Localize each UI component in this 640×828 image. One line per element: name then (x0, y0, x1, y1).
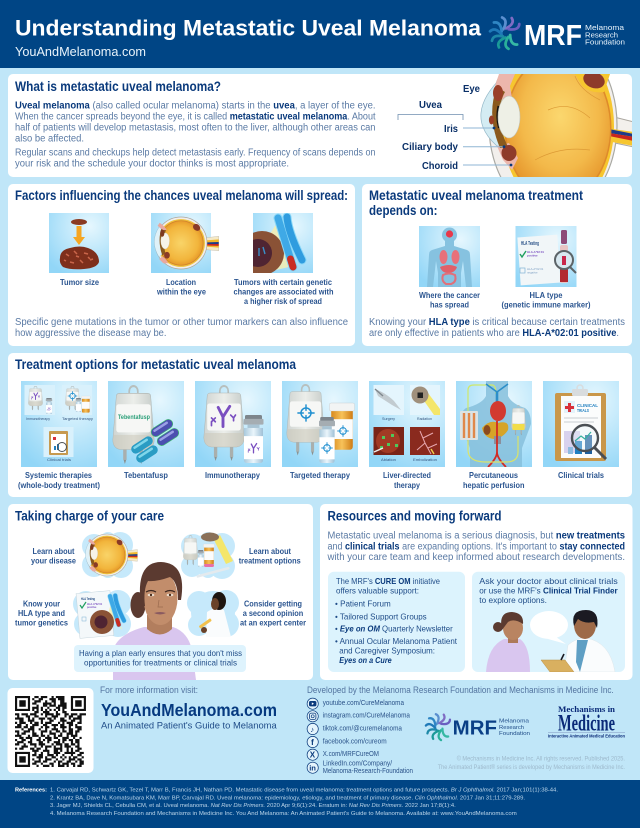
box: CURE OM initiative: • Annual Ocular Melanoma Patient (335, 637, 458, 646)
box: CURE OM initiative: and Caregiver Symposium: (339, 647, 435, 656)
body text: Specific gene mutations in the tumor or other tumor markers can also influence (15, 317, 348, 328)
icon: genetic changes (253, 213, 313, 273)
label: location: within the eye (156, 288, 206, 296)
label: tumor size: Tumor size (60, 278, 99, 287)
box: clinical trial finder (472, 572, 625, 672)
definition paragraph: Uveal melanoma (also called ocular melanoma) starts in the uvea, a layer of the eye. (15, 101, 376, 112)
label: learn about treatment options (239, 547, 301, 565)
illustration: woman patient (113, 562, 196, 680)
card: clinical trials: TRIALS (577, 408, 589, 413)
icon: HLA test card: negative (527, 270, 538, 274)
box: CURE OM initiative: • Tailored Support Groups (335, 612, 427, 621)
callout: plan early: Having a plan early ensures that you don't miss (79, 649, 242, 658)
social media links: tiktok.com/@curemelanoma (323, 723, 403, 732)
callout: plan early (74, 645, 246, 672)
label: systemic therapies: (whole-body treatment) (18, 481, 100, 490)
label: know your HLA type (15, 600, 68, 627)
cloud icon: HLA and genetics (73, 590, 131, 638)
developed by line: Developed by the Melanoma Research Foundation and Mechanisms in Medicine Inc. (307, 685, 614, 695)
icon: HLA test card: HLA-A*02:01 (527, 267, 544, 271)
body text: Knowing your HLA type is critical because certain treatments (369, 317, 625, 328)
MRF logo footer: MRF (453, 718, 497, 740)
label: liver-directed therapy (383, 471, 431, 490)
Mechanisms in Medicine logo: Interactive Animated Medical Education (548, 734, 625, 738)
label: genetic changes: changes are associated with (234, 288, 334, 296)
label: immunotherapy: Immunotherapy (205, 471, 260, 480)
copyright: The Animated Patient® series is developed by Mechanisms in Medicine Inc. (438, 764, 625, 771)
icon: HLA test card: positive (527, 254, 538, 258)
MRF logo footer: Foundation (499, 731, 530, 737)
label: second opinion: Consider getting (244, 600, 302, 609)
label: percutaneous hepatic perfusion (463, 471, 524, 490)
label: know your HLA type: HLA type and (18, 609, 65, 618)
label: percutaneous hepatic perfusion: hepatic perfusion (463, 481, 524, 490)
heading: Taking charge of your care (15, 508, 164, 524)
label: learn about treatment options: treatment options (239, 556, 301, 565)
eye anatomy labels: Ciliary body (402, 141, 458, 153)
references footer: 1. Carvajal RD, Schwartz GK, Tezel T, Marr B, Francis JH, Nathan PD. Metastatic disease from uveal melanoma: treatment options and future prospects. Br J Ophthalmol. 2017 Jan;101(1):38-44. (50, 788, 558, 794)
heading: Metastatic uveal melanoma treatment (369, 188, 583, 203)
title: Understanding Metastatic Uveal Melanoma (15, 16, 482, 40)
website promo block: YouAndMelanoma.com (101, 700, 277, 720)
box: CURE OM initiative: The MRF's CURE OM initiative (336, 577, 440, 586)
callout: plan early: opportunities for treatments or clinical trials (84, 659, 237, 668)
label: liver-directed therapy: Liver-directed (383, 471, 431, 480)
card: clinical trials: CLINICAL (577, 403, 598, 408)
MRF logo footer (426, 714, 530, 740)
MRF logo: MRF (524, 20, 582, 52)
eye anatomy illustration (480, 74, 632, 177)
label: know your HLA type: tumor genetics (15, 618, 68, 627)
body text (369, 317, 625, 339)
card: liver-directed therapy: Radiation (417, 417, 432, 421)
label: genetic changes (234, 278, 334, 306)
eye anatomy labels: Uvea (419, 99, 442, 111)
definition paragraph: also be affected. (15, 133, 84, 144)
Mechanisms in Medicine logo: Mechanisms in (558, 704, 615, 714)
social media links (307, 698, 413, 775)
icon: HLA test card: HLA-A*02:01 (527, 250, 544, 254)
copyright: © Mechanisms in Medicine Inc. All rights reserved. Published 2025. (457, 756, 625, 763)
illustration: patient and doctor (486, 610, 615, 672)
label: HLA type (502, 291, 591, 310)
label: second opinion: at an expert center (240, 618, 307, 627)
cloud icon: HLA and genetics: HLA-A*02:01 (87, 603, 103, 606)
label: location (156, 278, 206, 296)
label: learn about treatment options: Learn about (249, 547, 291, 556)
label: second opinion (240, 600, 307, 627)
label: liver-directed therapy: therapy (394, 481, 420, 490)
card: systemic therapies: Clinical trials (47, 458, 71, 462)
website promo block: For more information visit: (100, 685, 198, 695)
QR code (8, 688, 94, 773)
social media links: X.com/MRFCureOM (323, 749, 379, 758)
label: second opinion: a second opinion (243, 609, 303, 618)
card: liver-directed therapy: Embolization (413, 458, 437, 462)
card: targeted therapy (282, 381, 358, 467)
MRF logo (490, 17, 625, 52)
card: percutaneous hepatic perfusion (456, 381, 532, 467)
MRF logo footer: Melanoma (499, 719, 530, 725)
icon: HLA test card (516, 226, 576, 287)
social media links: youtube.com/CureMelanoma (323, 698, 405, 707)
label: HLA type: HLA type (530, 291, 563, 300)
box: clinical trial finder: Ask your doctor about clinical trials (479, 577, 618, 586)
panel: treatment depends on (362, 184, 632, 346)
social media links: ♪ (310, 725, 314, 734)
card: systemic therapies (21, 381, 97, 467)
cloud icon: treatment options (181, 532, 235, 579)
label: where the cancer has spread: Where the cancer (419, 291, 481, 300)
icon: HLA test card: HLA Testing (521, 241, 539, 247)
icon: eye location (151, 213, 219, 273)
panel: taking charge of your care (8, 504, 313, 680)
box: CURE OM initiative: • Patient Forum (335, 600, 391, 609)
box: CURE OM initiative: Eyes on a Cure (339, 656, 392, 665)
references footer: 2. Krantz BA, Dave N, Komatsubara KM, Marr BP, Carvajal RD. Uveal melanoma: epidemiology, etiology, and treatment of primary disease. Clin Ophthalmol. 2017 Jan 31;11:279-289. (50, 795, 525, 801)
Mechanisms in Medicine logo (548, 704, 625, 738)
definition paragraph: When the cancer spreads beyond the eye, it is called metastatic uveal melanoma. About (15, 112, 376, 123)
card: systemic therapies: Immunotherapy (26, 417, 50, 421)
box: CURE OM initiative (328, 572, 465, 672)
box: clinical trial finder: to explore options. (479, 596, 547, 605)
label: clinical trials: Clinical trials (558, 471, 604, 480)
heading: depends on: (369, 203, 438, 218)
website promo block: An Animated Patient's Guide to Melanoma (101, 720, 277, 731)
social media links: LinkedIn.com/Company/ (323, 758, 393, 767)
panel: resources and moving forward (320, 504, 632, 680)
label: genetic changes: Tumors with certain genetic (234, 278, 332, 287)
screening paragraph: Regular scans and checkups help detect metastasis early. Frequency of scans depends on (15, 148, 376, 159)
card: clinical trials (543, 381, 619, 467)
social media links: in (309, 764, 316, 772)
cloud icon: HLA and genetics: positive (87, 606, 97, 609)
social media links: X (310, 751, 316, 760)
icon: body with organs (419, 226, 480, 287)
cloud icon: learn about disease (82, 532, 137, 578)
references footer: 4. Melanoma Research Foundation and Mechanisms in Medicine Inc. You And Melanoma: An Animated Patient's Guide to Melanoma. Available at: www.YouAndMelanoma.com (50, 811, 517, 817)
MRF logo: Melanoma (585, 23, 625, 32)
definition paragraph (15, 101, 376, 144)
card: systemic therapies: Targeted therapy (62, 417, 93, 421)
label: know your HLA type: Know your (23, 600, 61, 609)
card: immunotherapy (195, 381, 271, 467)
label: where the cancer has spread: has spread (430, 301, 469, 310)
body text (15, 317, 348, 339)
heading: Treatment options for metastatic uveal melanoma (15, 357, 296, 372)
MRF logo footer: Research (499, 725, 524, 731)
social media links: facebook.com/cureom (323, 736, 387, 745)
definition paragraph: half of patients will develop metastasis, most often to the liver, although other areas can (15, 122, 376, 134)
body text: how aggressive the disease may be. (15, 328, 166, 339)
box: clinical trial finder: or use the MRF's Clinical Trial Finder (479, 587, 618, 596)
body text: with your care team and keep informed about research developments. (327, 552, 625, 563)
icon: tumor size (49, 213, 109, 273)
heading (369, 188, 583, 218)
label: percutaneous hepatic perfusion: Percutaneous (469, 471, 518, 480)
body text: and clinical trials are expanding options. It's important to stay connected (328, 541, 625, 552)
social media links: f (311, 737, 314, 747)
references footer (0, 780, 640, 828)
heading: Resources and moving forward (328, 508, 502, 524)
heading: What is metastatic uveal melanoma? (15, 79, 221, 94)
MRF logo: Foundation (585, 38, 625, 47)
references footer: 3. Jager MJ, Shields CL, Cebulla CM, et al. Uveal melanoma. Nat Rev Dis Primers. 2020 Apr 9;6(1):24. Erratum in: Nat Rev Dis Primers. 2022 Jan 17;8(1):4. (50, 803, 456, 809)
body text: Metastatic uveal melanoma is a serious diagnosis, but new treatments (328, 530, 625, 541)
label: systemic therapies (18, 471, 100, 490)
copyright (438, 756, 625, 771)
card: tebentafusp (108, 381, 184, 467)
card: tebentafusp: Tebentafusp (118, 414, 150, 421)
panel: what is metastatic uveal melanoma (8, 74, 632, 177)
panel: factors influencing spread (8, 184, 355, 346)
body text (327, 530, 625, 563)
website url: YouAndMelanoma.com (15, 45, 146, 59)
label: HLA type: (genetic immune marker) (502, 301, 591, 310)
social media links: Melanoma-Research-Foundation (323, 766, 413, 775)
label: targeted therapy: Targeted therapy (290, 471, 350, 480)
label: systemic therapies: Systemic therapies (25, 471, 92, 480)
website promo block (100, 685, 277, 731)
label: where the cancer has spread (419, 291, 481, 310)
eye anatomy labels (398, 83, 512, 172)
body text: are only effective in patients who are HLA-A*02:01 positive. (369, 328, 619, 339)
screening paragraph: your risk and the schedule your doctor thinks is most appropriate. (15, 159, 289, 170)
eye anatomy labels: Iris (444, 123, 458, 135)
cloud icon: HLA and genetics: HLA Testing (81, 597, 95, 601)
social media links: instagram.com/CureMelanoma (323, 711, 411, 720)
panel: treatment options (8, 353, 632, 497)
box: CURE OM initiative: • Eye on OM Quarterly Newsletter (335, 625, 453, 634)
card: liver-directed therapy (369, 381, 445, 467)
label: tebentafusp: Tebentafusp (124, 471, 168, 480)
header banner (0, 0, 640, 68)
label: learn about your disease: your disease (31, 556, 76, 565)
card: liver-directed therapy: Ablation (381, 458, 396, 462)
card: liver-directed therapy: Surgery (382, 417, 395, 421)
eye anatomy labels: Eye (463, 83, 480, 95)
heading: Factors influencing the chances uveal melanoma will spread: (15, 188, 348, 203)
eye anatomy labels: Choroid (422, 160, 458, 172)
MRF logo: Research (585, 30, 618, 39)
screening paragraph (15, 148, 376, 170)
box: CURE OM initiative: offers valuable support: (336, 587, 419, 596)
label: location: Location (166, 278, 196, 287)
references footer: References: (15, 788, 47, 794)
label: learn about your disease: Learn about (32, 547, 75, 556)
cloud icon: second opinion doctor (187, 590, 239, 637)
label: genetic changes: a higher risk of spread (244, 297, 322, 306)
label: learn about your disease (31, 547, 76, 565)
